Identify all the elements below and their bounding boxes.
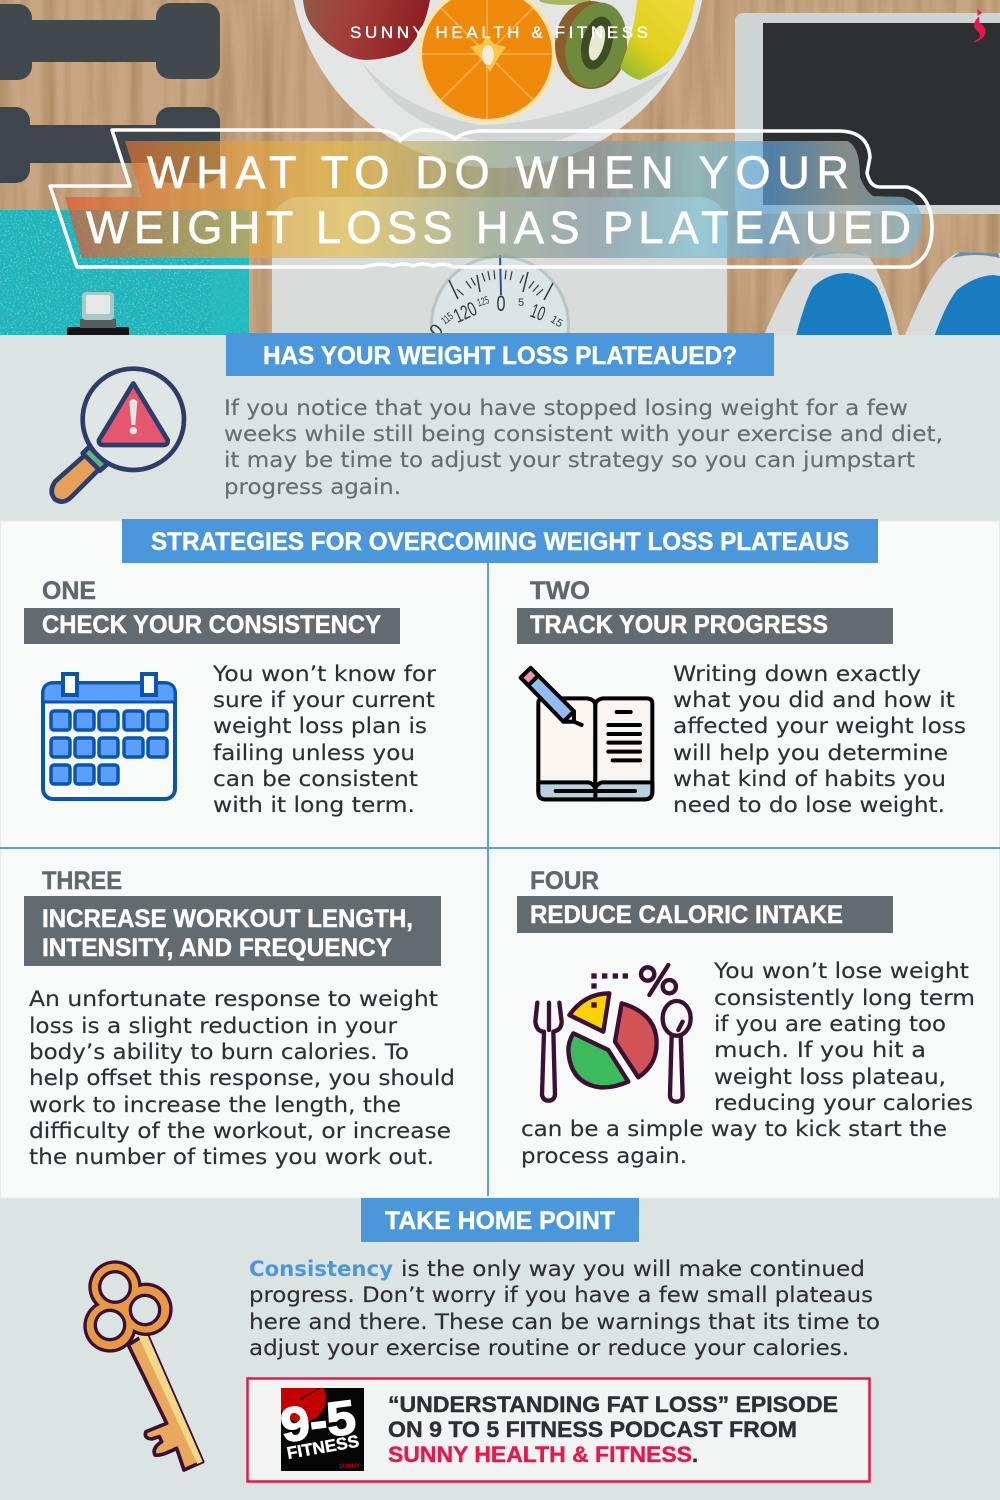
fruit plate — [290, 0, 706, 168]
banana — [620, 0, 695, 80]
callout: podcast — [248, 1374, 870, 1482]
body text: You won’t lose weight — [713, 959, 969, 984]
podcast cover: 9-5 fitness: 9-5 — [278, 1391, 359, 1453]
panel: strategies — [0, 519, 1000, 1198]
strategy two — [517, 577, 966, 818]
takeaway text: is the only way you will make continued — [401, 1257, 865, 1282]
label: one: ONE — [42, 577, 96, 605]
body text — [212, 662, 436, 818]
body text: help offset this response, you should — [29, 1066, 455, 1091]
title band: rainbow translucent — [65, 141, 922, 258]
icon: magnifier with warning — [52, 369, 184, 502]
body text: difficulty of the workout, or increase — [29, 1119, 451, 1144]
brand name: SUNNY HEALTH & FITNESS — [350, 23, 648, 42]
podcast cover: 9-5 fitness: FITNESS — [285, 1432, 361, 1463]
takeaway text — [249, 1257, 880, 1361]
podcast text — [388, 1392, 838, 1467]
heading bar: HAS YOUR WEIGHT LOSS PLATEAUED? — [263, 342, 737, 370]
takeaway text: Consistency — [249, 1257, 393, 1282]
logo: red S figure — [974, 10, 985, 42]
intro text: If you notice that you have stopped losing weight for a few — [224, 396, 908, 421]
green apple — [539, 0, 591, 5]
body text: You won’t know for — [212, 662, 436, 687]
body text: the number of times you work out. — [29, 1145, 434, 1170]
body text: much. If you hit a — [714, 1038, 926, 1063]
body text: sure if your current — [213, 688, 435, 713]
podcast text: . — [692, 1442, 698, 1467]
bathroom scale: 125 — [476, 294, 491, 310]
intro text — [224, 396, 943, 500]
kiwi — [555, 1, 627, 89]
bathroom scale: 115 — [439, 310, 456, 327]
title outline — [50, 130, 932, 267]
title: WHAT TO DO WHEN YOUR — [147, 147, 849, 198]
bathroom scale: 120 — [450, 298, 480, 328]
label: four: FOUR — [530, 867, 599, 895]
podcast text: “UNDERSTANDING FAT LOSS” EPISODE — [388, 1392, 838, 1417]
panel: has your weight loss plateaued — [52, 333, 943, 502]
body text: An unfortunate response to weight — [29, 987, 438, 1012]
body text: with it long term. — [213, 793, 415, 818]
bathroom scale: 10 — [527, 300, 548, 326]
strategy four — [517, 867, 975, 1169]
body text — [673, 662, 966, 818]
strategy one — [24, 577, 436, 818]
icon: notebook and pencil — [521, 668, 652, 799]
heading: track your progress: TRACK YOUR PROGRESS — [530, 611, 828, 639]
intro text: weeks while still being consistent with your exercise and diet, — [224, 422, 943, 447]
body text: Writing down exactly — [673, 662, 921, 687]
dial ticks — [449, 270, 553, 300]
water bottle — [67, 292, 129, 337]
icon: food pie chart — [535, 965, 691, 1102]
heading bar: take home point: TAKE HOME POINT — [385, 1207, 615, 1235]
intro text: progress again. — [224, 475, 401, 500]
heading: increase workout: INTENSITY, AND FREQUENCY — [42, 934, 392, 962]
body text: what kind of habits you — [673, 767, 946, 792]
body text: work to increase the length, the — [29, 1093, 401, 1118]
body text — [521, 959, 975, 1169]
body text — [29, 987, 455, 1170]
body text: loss is a slight reduction in your — [29, 1014, 397, 1039]
dumbbell top — [0, 3, 220, 80]
orange — [417, 0, 557, 124]
body text: affected your weight loss — [673, 714, 966, 739]
bathroom scale: 0 — [496, 291, 506, 316]
body text: consistently long term — [714, 986, 975, 1011]
heading: check your consistency: CHECK YOUR CONSISTENCY — [42, 611, 381, 639]
heading: reduce caloric intake — [517, 896, 893, 933]
apple — [303, 0, 430, 60]
heading: track your progress — [517, 608, 893, 644]
bathroom scale: 0 — [425, 320, 447, 341]
panel: take home point — [83, 1198, 880, 1482]
body text: body’s ability to burn calories. To — [29, 1040, 409, 1065]
podcast text: ON 9 TO 5 FITNESS PODCAST FROM — [388, 1417, 797, 1442]
intro text: it may be time to adjust your strategy so you can jumpstart — [224, 448, 915, 473]
body text: will help you determine — [673, 741, 948, 766]
heading bar — [226, 333, 774, 376]
body text: process again. — [521, 1144, 687, 1169]
heading: reduce caloric intake: REDUCE CALORIC INTAKE — [530, 901, 843, 929]
label: two: TWO — [530, 577, 590, 605]
strategy three — [24, 867, 455, 1170]
bathroom scale — [272, 197, 727, 333]
takeaway text: progress. Don’t worry if you have a few small plateaus — [249, 1283, 873, 1308]
label: three: THREE — [42, 867, 122, 895]
towel — [0, 210, 249, 335]
takeaway text: adjust your exercise routine or reduce your calories. — [249, 1336, 849, 1361]
body text: need to do lose weight. — [673, 793, 945, 818]
podcast cover: 9-5 fitness — [281, 1388, 364, 1471]
dumbbell bottom — [0, 107, 220, 183]
heading bar: take home point — [361, 1198, 639, 1242]
icon: calendar — [43, 674, 175, 799]
title — [86, 147, 911, 253]
heading: increase workout — [24, 896, 441, 966]
body text: weight loss plan is — [213, 714, 427, 739]
body text: weight loss plateau, — [714, 1065, 946, 1090]
title: WEIGHT LOSS HAS PLATEAUED — [86, 202, 911, 253]
heading: increase workout: INCREASE WORKOUT LENGTH, — [42, 905, 413, 933]
body text: can be a simple way to kick start the — [521, 1117, 947, 1142]
podcast cover: 9-5 fitness: SUNNY — [339, 1464, 360, 1470]
icon: key — [83, 1260, 203, 1470]
body text: if you are eating too — [714, 1012, 946, 1037]
heading bar: strategies: STRATEGIES FOR OVERCOMING WEIGHT LOSS PLATEAUS — [151, 528, 849, 556]
body text: reducing your calories — [714, 1091, 973, 1116]
body text: can be consistent — [213, 767, 418, 792]
tablet — [735, 13, 1000, 214]
body text: failing unless you — [213, 741, 415, 766]
bathroom scale: 15 — [548, 314, 565, 330]
heading bar: strategies — [122, 519, 878, 563]
bathroom scale: 5 — [518, 297, 524, 309]
podcast text: SUNNY HEALTH & FITNESS — [388, 1442, 692, 1467]
takeaway text: here and there. These can be warnings that its time to — [249, 1310, 880, 1335]
body text: what you did and how it — [673, 688, 955, 713]
shoes — [762, 250, 1000, 340]
hero photo: fitness flat lay — [0, 0, 1000, 335]
